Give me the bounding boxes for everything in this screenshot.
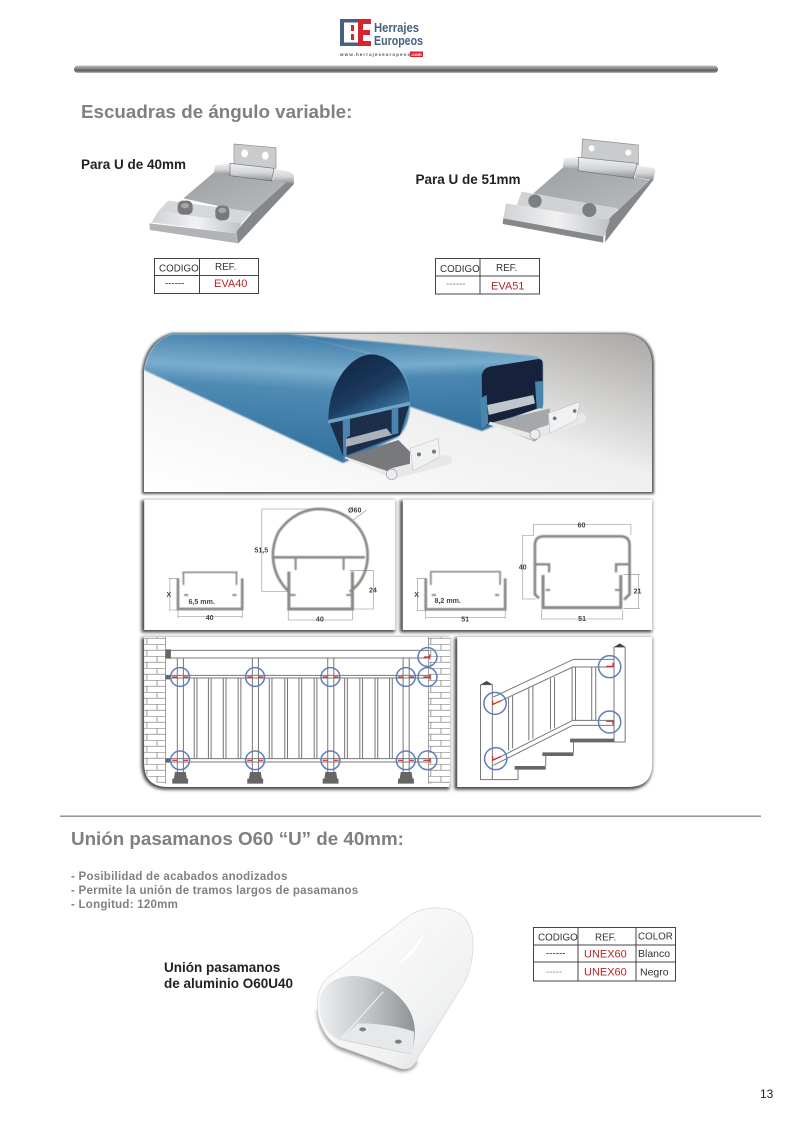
label: Unión pasamanos de aluminio	[164, 960, 293, 991]
table: EVA40	[154, 258, 258, 294]
dimension labels profile 51: X	[414, 592, 419, 599]
red brackets	[172, 655, 430, 763]
dimension labels round	[254, 508, 377, 624]
logo web address: .com	[411, 52, 422, 57]
table text	[538, 932, 673, 978]
heading: Escuadras de ángulo variable: Escuadras de ángulo variable:	[81, 101, 352, 122]
panel: stair elevation with joints	[454, 637, 652, 790]
dimensions 40 profile	[169, 578, 242, 618]
label: Para U de 51mm: Para U de 51mm	[416, 172, 521, 187]
page number: 13	[760, 1087, 774, 1101]
table text: Blanco	[638, 948, 670, 960]
dimension labels rectangular: 51	[578, 616, 586, 623]
dimension labels profile: 6,5 mm.	[188, 599, 215, 606]
logo wordmark: Herrajes	[374, 20, 419, 35]
logo mark	[340, 19, 371, 46]
front round profile body	[144, 334, 410, 463]
dimension labels profile 51: 51	[461, 616, 469, 623]
wall brackets	[165, 649, 171, 763]
table text: REF.	[215, 262, 236, 273]
table text	[440, 263, 524, 292]
table text: EVA40	[214, 278, 247, 290]
dimension labels profile 51: 8,2 mm.	[435, 598, 461, 605]
dimension labels rectangular: 40	[519, 565, 527, 572]
table: UNEX60	[534, 928, 676, 981]
rear rectangular profile body	[290, 334, 543, 431]
table text: CODIGO	[159, 264, 199, 274]
dimension labels profile	[167, 592, 215, 622]
dimension labels round: 40	[316, 617, 324, 624]
dimension labels round: 51,5	[254, 548, 268, 555]
panel: 3D photo of handrail profiles	[142, 333, 654, 494]
header bar	[74, 66, 718, 73]
logo: Herrajes Europeos	[339, 19, 423, 57]
dimensions round profile	[262, 509, 373, 620]
post bases	[172, 772, 414, 784]
feature list: - Longitud: 120mm	[71, 899, 178, 911]
dimension labels rectangular	[519, 522, 642, 623]
stair posts and rails	[481, 647, 625, 780]
table text: ------	[546, 948, 566, 960]
table text: UNEX60	[584, 966, 627, 978]
panel: railing elevation with joints	[141, 637, 450, 790]
dimension labels profile: 40	[206, 615, 214, 622]
dimension labels profile: X	[167, 592, 172, 599]
table text: COLOR	[638, 932, 673, 942]
label: Unión pasamanos de aluminio: Unión pasamanos	[164, 960, 280, 975]
dimension labels rectangular: 21	[634, 589, 642, 596]
round handrail profile	[273, 509, 368, 609]
U profile 40	[178, 572, 242, 609]
table text: ------	[446, 279, 466, 290]
table text: UNEX60	[584, 948, 627, 960]
dimensions 51 profile	[417, 578, 505, 619]
dimension labels profile 51	[414, 592, 469, 623]
feature list	[71, 871, 358, 911]
rectangular handrail profile	[535, 536, 630, 608]
logo web address: www.herrajeseuropeos	[339, 52, 410, 57]
dimensions rectangular profile	[522, 524, 640, 619]
table text: CODIGO	[440, 264, 480, 275]
hinge image: 51mm	[503, 139, 655, 243]
joint markers	[484, 656, 621, 770]
label: Para U de 40mm: Para U de 40mm	[81, 157, 186, 172]
table text: Negro	[640, 966, 669, 978]
table: EVA51	[436, 258, 540, 294]
table text: -----	[546, 967, 562, 978]
hinge image: 40mm	[149, 144, 294, 243]
divider rule	[60, 816, 761, 817]
dimension labels rectangular: 60	[578, 522, 585, 529]
logo wordmark line 2: Europeos	[374, 33, 423, 48]
table text: EVA51	[491, 280, 524, 292]
feature list: - Posibilidad de acabados anodizados	[71, 871, 288, 883]
label: Unión pasamanos de aluminio: de aluminio O60U40	[164, 976, 293, 991]
joint markers	[171, 648, 437, 770]
feature list: - Permite la unión de tramos largos de pasamanos	[71, 885, 358, 897]
table text: REF.	[595, 932, 616, 944]
heading: Unión pasamanos: Unión pasamanos O60 “U” de 40mm:	[71, 828, 404, 849]
rectangular profile end detail	[480, 359, 582, 442]
table text	[159, 262, 247, 290]
round profile end detail	[328, 354, 447, 480]
panel: cross-section rectangular with U 51	[400, 500, 652, 632]
red brackets	[492, 663, 613, 760]
stair treads	[515, 739, 614, 770]
table text: CODIGO	[538, 932, 578, 944]
product photo: union piece	[317, 908, 473, 1072]
table text: REF.	[496, 263, 517, 274]
rails, posts and balusters	[165, 650, 428, 772]
U profile 51	[426, 572, 505, 609]
table text: ------	[165, 278, 185, 290]
panel: cross-section O60 with U 40	[141, 500, 395, 632]
post caps	[481, 643, 626, 685]
dimension labels round: Ø60	[348, 508, 361, 515]
dimension labels round: 24	[369, 587, 377, 594]
brick walls	[144, 637, 450, 784]
